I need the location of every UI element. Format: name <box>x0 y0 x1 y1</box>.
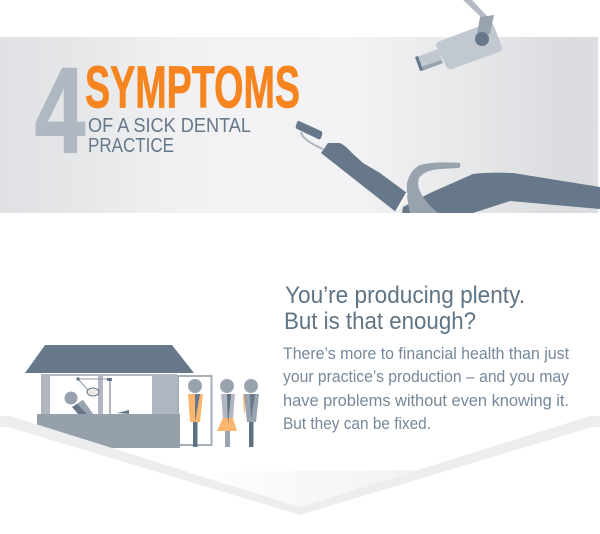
text block: body copy: have problems without even knowing it. <box>283 392 569 410</box>
door <box>178 376 212 445</box>
base <box>37 414 180 448</box>
heading: You’re producing plenty. <box>285 282 525 309</box>
title: symptoms: SYMPTOMS <box>85 54 300 120</box>
heading: But is that enough? <box>284 308 476 335</box>
walls <box>41 374 177 415</box>
icon: dental clinic building <box>25 345 259 448</box>
text block: body copy: But they can be fixed. <box>283 415 431 433</box>
heading <box>284 282 525 335</box>
text block: body copy: There’s more to financial health than just <box>283 345 569 363</box>
icon: dental lamp <box>415 0 502 71</box>
person 2 <box>217 379 237 447</box>
subtitle: OF A SICK DENTAL <box>88 115 251 137</box>
chevron divider <box>0 416 600 515</box>
person 1 <box>188 379 203 447</box>
text block: body copy: your practice’s production – and you may <box>283 368 570 386</box>
subtitle <box>88 115 251 157</box>
panel: header banner <box>0 0 600 213</box>
person 3 <box>243 379 259 447</box>
text block: body copy <box>283 345 570 433</box>
subtitle: PRACTICE <box>88 135 174 157</box>
icon: dental chair <box>296 121 600 213</box>
patient <box>64 392 129 414</box>
roof <box>25 345 194 373</box>
interior lamp <box>76 377 112 414</box>
big number 4: 4 <box>35 42 85 178</box>
